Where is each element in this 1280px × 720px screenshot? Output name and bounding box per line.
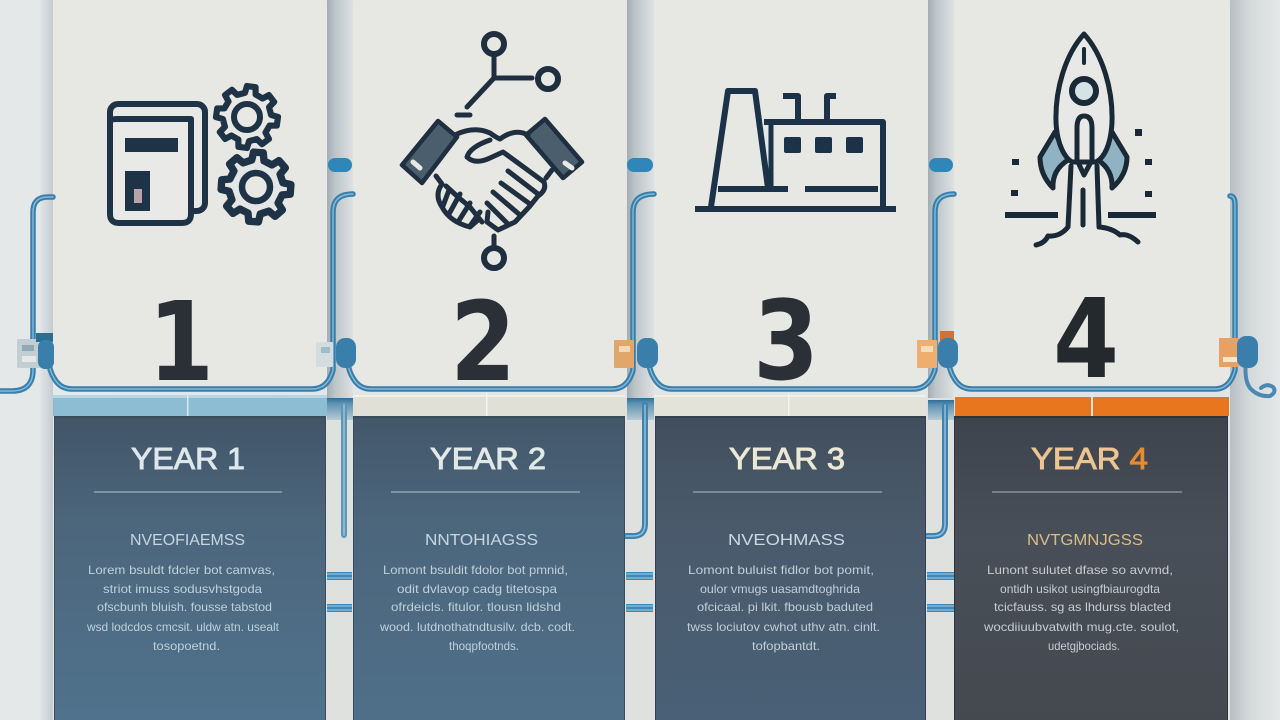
heading: year 4: YEAR 4	[1031, 441, 1148, 476]
subheading: NVTGMNJGSS	[1027, 532, 1143, 549]
panel: year 2 card	[353, 0, 627, 407]
body text: tosopoetnd.	[153, 639, 220, 653]
subheading: NVEOFIAEMSS	[130, 532, 245, 549]
pipe: left inlet	[0, 197, 53, 391]
body text: twss lociutov cwhot uthv atn. cinlt.	[687, 620, 880, 634]
body text	[379, 563, 575, 653]
icon: handshake	[402, 34, 582, 268]
body text: Lomont buluist fidlor bot pomit,	[688, 563, 874, 577]
body text: striot imuss sodusvhstgoda	[103, 582, 262, 596]
body text: Lomont bsuldit fdolor bot pmnid,	[383, 563, 568, 577]
body text: ontidh usikot usingfbiaurogdta	[1000, 582, 1160, 596]
pipe: year 4 outlet	[948, 196, 1274, 396]
body text: Lorem bsuldt fdcler bot camvas,	[88, 563, 275, 577]
number 2: 2	[450, 279, 516, 407]
number 4: 4	[1053, 276, 1119, 404]
pipeline connecting the cards	[0, 165, 1274, 396]
icon: rocket	[1005, 34, 1156, 245]
body text	[687, 563, 880, 653]
body text: odit dvlavop cadg titetospa	[397, 582, 557, 596]
body text: ofrdeicls. fitulor. tlousn lidshd	[391, 600, 561, 614]
number 3: 3	[753, 278, 819, 406]
heading: year 3: YEAR 3	[729, 441, 845, 476]
pipe: year 2 to year 3	[347, 194, 654, 389]
stubs at top of gutters	[335, 158, 946, 172]
panel: year 1 details	[54, 416, 326, 720]
panel: year 3 card	[654, 0, 928, 406]
panel: year 1 card	[53, 0, 327, 407]
panel: year 2 details	[353, 416, 625, 720]
icon: factory	[695, 91, 896, 209]
heading: year 2: YEAR 2	[430, 441, 546, 476]
connector joints	[17, 331, 1258, 369]
number 1: 1	[148, 279, 214, 407]
body text	[983, 563, 1179, 653]
subheading: NNTOHIAGSS	[425, 532, 538, 549]
gutter caps under the pipeline	[327, 398, 954, 420]
pipe: year 1 to year 2	[48, 194, 353, 389]
body text: wsd lodcdos cmcsit. uldw atn. usealt	[86, 620, 280, 634]
accent bars	[53, 393, 1229, 417]
body text: wocdiiuubvatwith mug.cte. soulot,	[983, 620, 1179, 634]
body text: thoqpfootnds.	[449, 639, 519, 653]
body text: oulor vmugs uasamdtoghrida	[700, 582, 860, 596]
body text: udetgjbociads.	[1048, 639, 1120, 653]
heading: year 1: YEAR 1	[131, 441, 245, 476]
body text: ofcicaal. pi lkit. fbousb baduted	[697, 600, 873, 614]
body text: Lunont sulutet dfase so avvmd,	[987, 563, 1173, 577]
body text: tcicfauss. sg as lhdurss blacted	[994, 600, 1171, 614]
body text: ofscbunh bluish. fousse tabstod	[97, 600, 272, 614]
panel: year 4 details	[954, 416, 1228, 720]
panel: year 3 details	[655, 416, 926, 720]
lower connector pipes	[327, 405, 954, 610]
body text: wood. lutdnothatndtusilv. dcb. codt.	[379, 620, 575, 634]
icon: book and gears	[110, 82, 293, 224]
panel: year 4 card	[954, 0, 1230, 404]
body text: tofopbantdt.	[752, 639, 820, 653]
subheading: NVEOHMASS	[728, 532, 845, 549]
body text	[86, 563, 280, 653]
pipe: year 3 to year 4	[648, 194, 954, 389]
